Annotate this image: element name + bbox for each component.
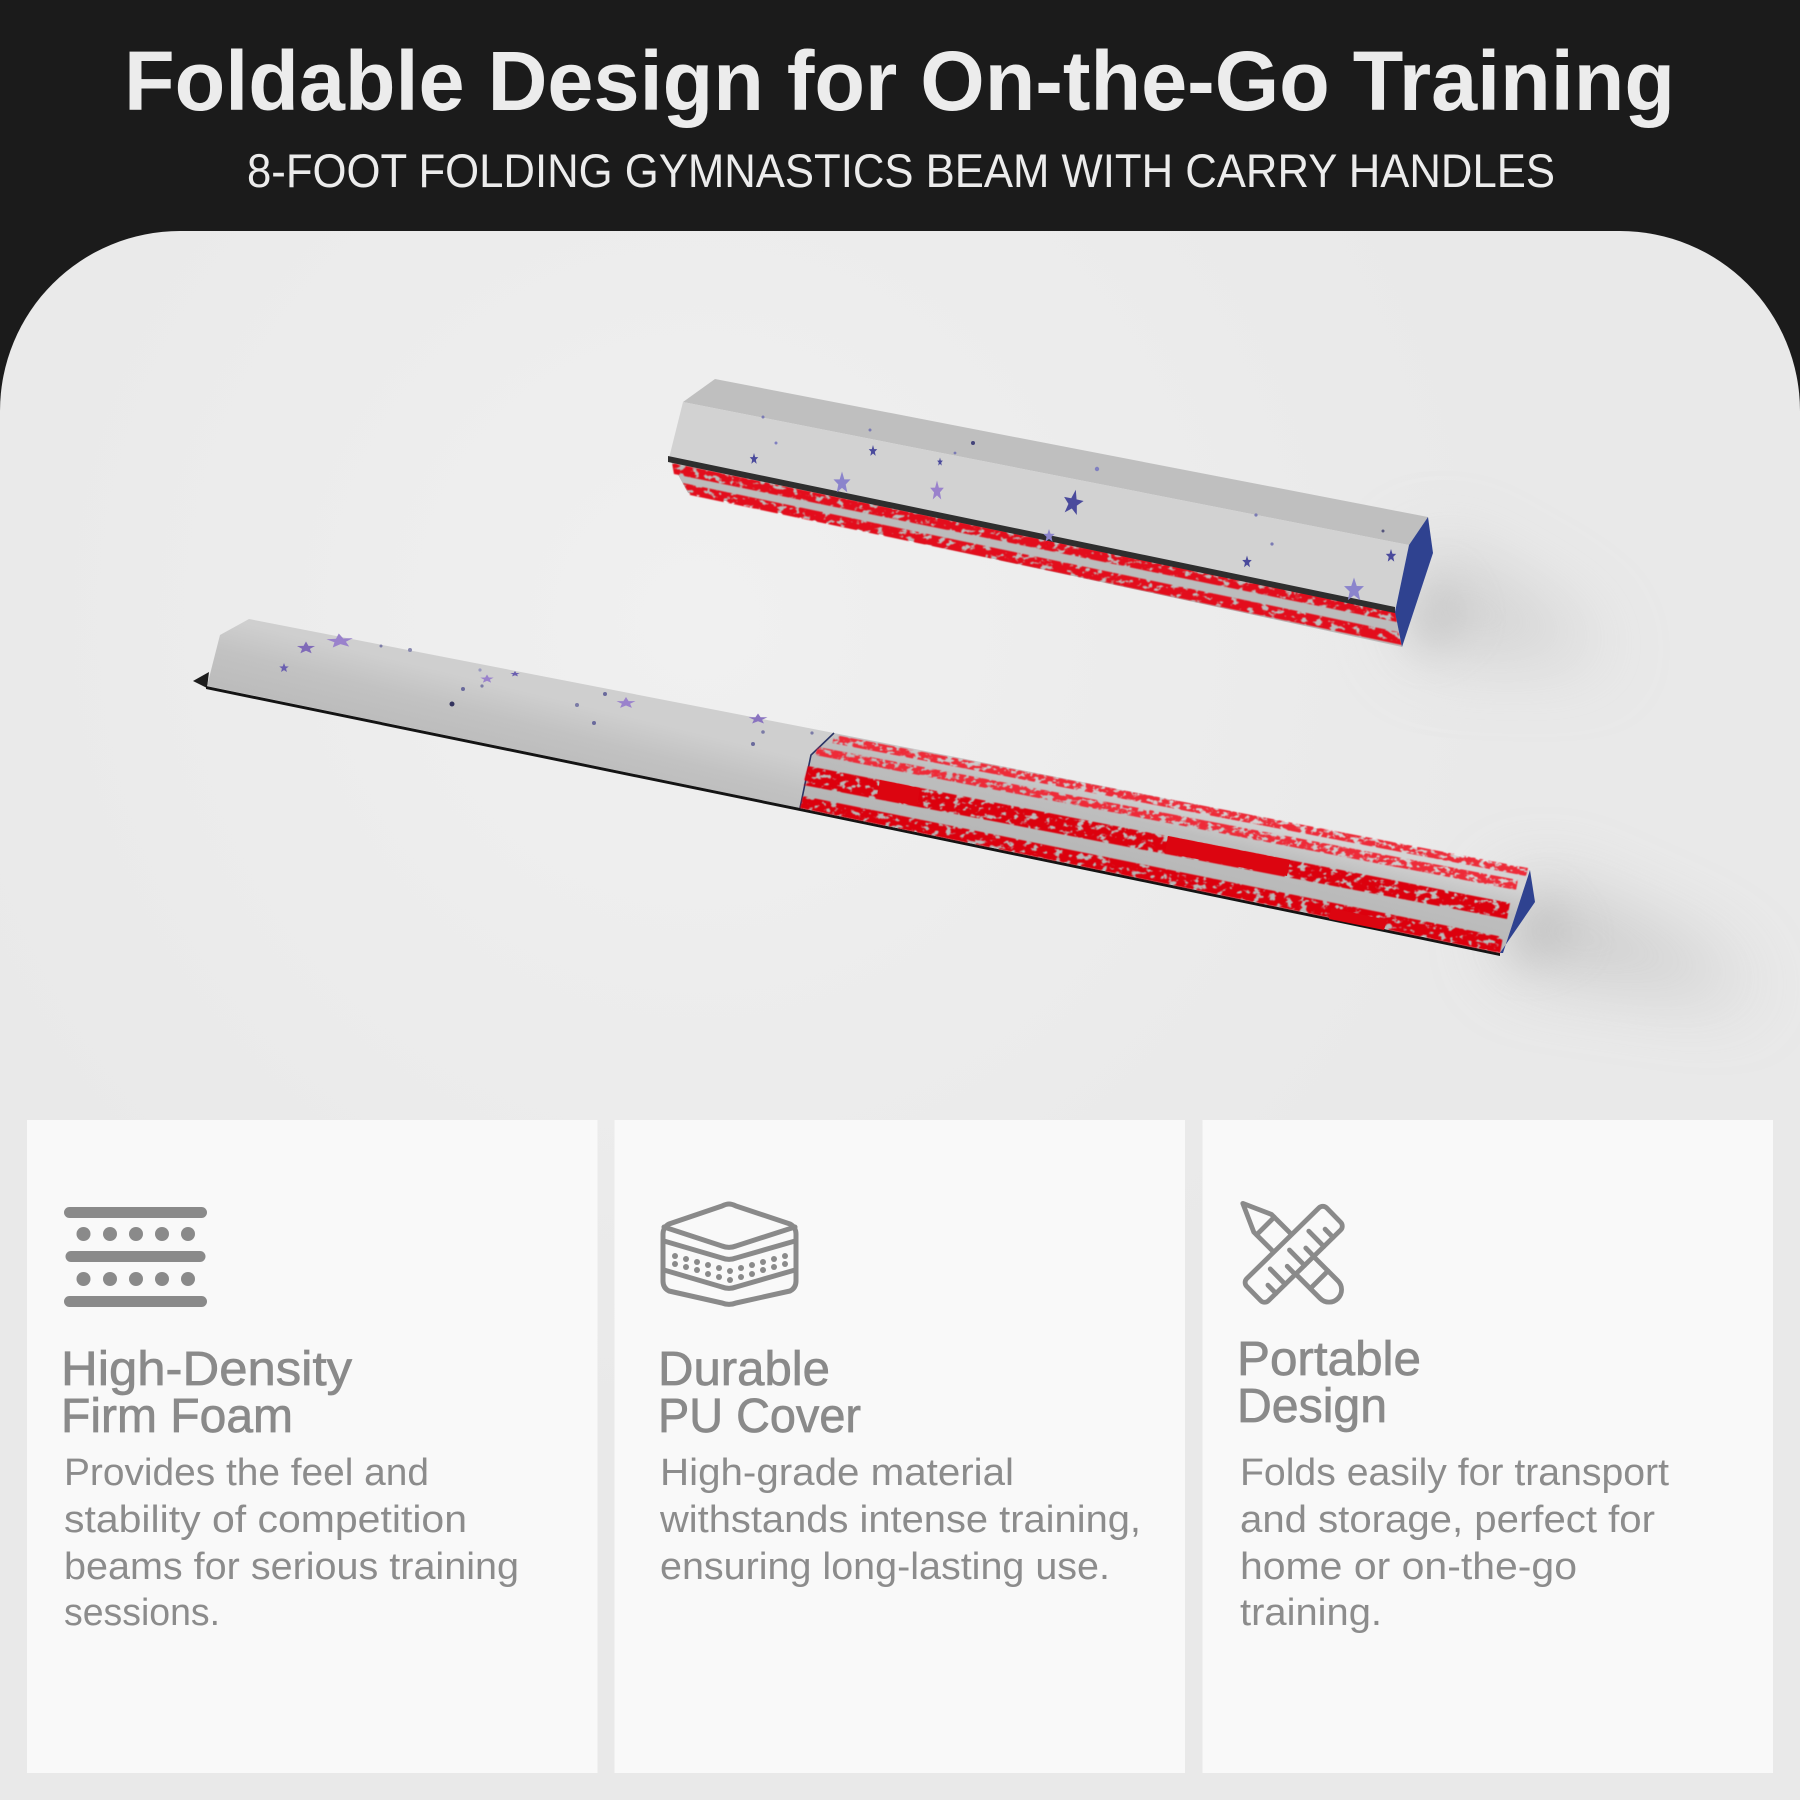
title: Foldable Design for On-the-Go Training (124, 34, 1675, 128)
folded beam red stripes (672, 463, 1402, 645)
header band (0, 0, 1800, 420)
folded beam lower front face (670, 460, 1402, 647)
card 3 heading: Portable (1237, 1333, 1421, 1386)
card 2 body text: withstands intense training, (659, 1499, 1141, 1541)
card: portable design (1202, 1120, 1773, 1773)
card 1 heading: High-Density (61, 1343, 352, 1396)
product: folded beam (top) (668, 379, 1433, 647)
folded beam hinge strip (668, 456, 1395, 613)
unfolded beam dark red stripes (800, 766, 1510, 953)
icon: crossed pencil and ruler (1234, 1195, 1347, 1307)
unfolded beam foot (193, 672, 209, 688)
icon: foam layers (64, 1207, 207, 1307)
card: high-density firm foam (27, 1120, 598, 1773)
card 3 body text: Folds easily for transport (1240, 1452, 1669, 1494)
icon: mattress dots (672, 1253, 788, 1283)
card 3 body text: and storage, perfect for (1240, 1499, 1655, 1541)
card: durable pu cover (614, 1120, 1185, 1773)
unfolded beam solid red patches (877, 780, 1387, 930)
card 3 heading: Design (1237, 1380, 1387, 1433)
card 1 body text: sessions. (64, 1592, 220, 1634)
card 2 background (614, 1120, 1185, 1773)
unfolded beam seam (800, 733, 834, 808)
card 1 body text (64, 1452, 519, 1634)
card 1 heading: Firm Foam (61, 1390, 293, 1443)
card 2 heading: PU Cover (658, 1390, 861, 1443)
card 2 body text: High-grade material (660, 1452, 1014, 1494)
product: unfolded beam (bottom) (193, 619, 1535, 956)
unfolded beam base line (206, 686, 1500, 956)
card 2 heading: Durable (658, 1343, 830, 1396)
card 1 body text: stability of competition (64, 1499, 467, 1541)
unfolded beam end cap (1500, 870, 1535, 953)
card 1 heading (61, 1343, 352, 1443)
card 2 body text (659, 1452, 1141, 1588)
card 1 body text: Provides the feel and (64, 1452, 429, 1494)
card 3 background (1202, 1120, 1773, 1773)
icon: mattress layers (663, 1204, 796, 1304)
unfolded beam light red stripes (815, 735, 1528, 890)
unfolded beam striped section (800, 733, 1530, 953)
folded beam top face (683, 379, 1428, 545)
card 3 heading (1237, 1333, 1421, 1433)
card 3 body text: home or on-the-go (1240, 1546, 1577, 1588)
beam shadows (1400, 540, 1760, 1000)
card 1 body text: beams for serious training (64, 1546, 519, 1588)
folded beam stars (750, 416, 1396, 600)
unfolded beam white section (207, 619, 834, 808)
card 3 body text: training. (1240, 1592, 1382, 1634)
card 2 body text: ensuring long-lasting use. (660, 1546, 1110, 1588)
subtitle: 8-FOOT FOLDING GYMNASTICS BEAM WITH CARRY HANDLES (247, 144, 1555, 197)
folded beam end cap (1395, 517, 1433, 647)
card 3 body text (1240, 1452, 1669, 1634)
unfolded beam stars (279, 633, 814, 746)
card 2 heading (658, 1343, 861, 1443)
card 1 background (27, 1120, 598, 1773)
folded beam upper front face (669, 402, 1409, 612)
